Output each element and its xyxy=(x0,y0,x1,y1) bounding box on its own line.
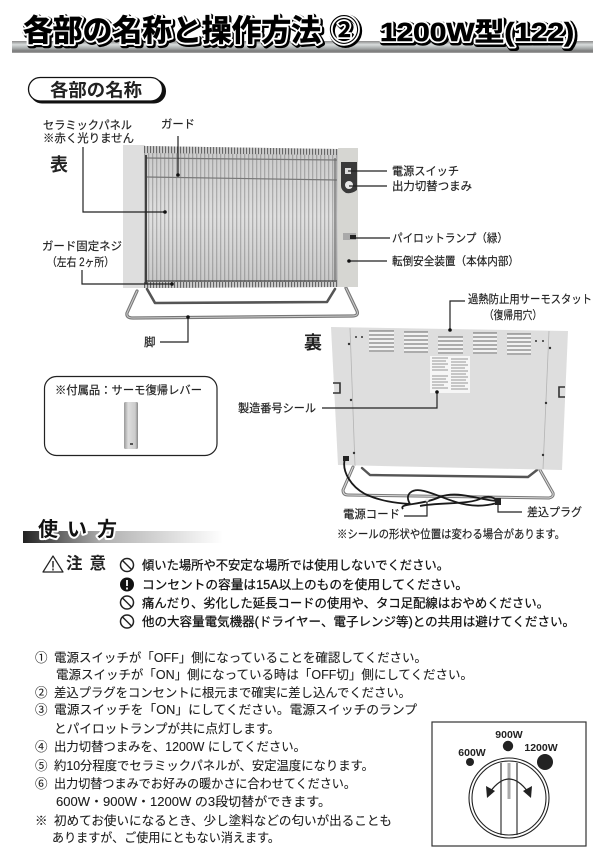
label: 裏: 裏 xyxy=(304,333,322,353)
instruction list: 電源スイッチが「OFF」側になっていることを確認してください。 xyxy=(54,650,427,665)
label: guard screws xyxy=(42,240,122,269)
note: sticker varies: ※シールの形状や位置は変わる場合があります。 xyxy=(337,527,565,541)
leader: power switch xyxy=(348,170,387,172)
label: ceramic panel: ※赤く光りません xyxy=(43,131,134,145)
section heading: 使い方: い xyxy=(67,519,87,541)
leader: output knob xyxy=(349,185,387,187)
instruction list: 電源スイッチが「ON」側になっている時は「OFF切」側にしてください。 xyxy=(56,667,473,682)
label: 表: 表 xyxy=(50,155,68,175)
title xyxy=(23,15,576,50)
section heading: 使い方: 使 xyxy=(38,518,58,541)
label: thermostat xyxy=(468,292,592,322)
leader: thermostat xyxy=(448,301,465,332)
label: legs: 脚 xyxy=(144,335,156,349)
caution list: 痛んだり、劣化した延長コードの使用や、タコ足配線はおやめください。 xyxy=(142,596,549,610)
icon: warning triangle xyxy=(43,556,63,572)
instruction list: 電源スイッチを「ON」にしてください。電源スイッチのランプ xyxy=(54,703,417,717)
section heading: 使い方: 使 xyxy=(38,518,58,541)
plug xyxy=(495,498,501,505)
icon: mandatory xyxy=(120,578,134,592)
leader: tip-over switch xyxy=(347,259,387,263)
instruction list: 差込プラグをコンセントに根元まで確実に差し込んでください。 xyxy=(54,685,411,700)
dial wattage labels: 1200W xyxy=(524,742,558,754)
title: 各部の名称と操作方法 xyxy=(24,16,322,50)
section heading: 使い方: 方 xyxy=(97,518,117,541)
label: guard screws: （左右 2ヶ所） xyxy=(47,255,114,269)
section pill: 各部の名称: 各部の名称 xyxy=(50,80,142,100)
dial position dots xyxy=(466,741,553,770)
label: power switch: 電源スイッチ xyxy=(392,164,459,178)
side brackets xyxy=(333,383,340,393)
title: ② xyxy=(329,15,359,48)
instruction list: 600W・900W・1200W の3段切替ができます。 xyxy=(56,794,331,809)
caution list: コンセントの容量は15A以上のものを使用してください。 xyxy=(142,577,468,592)
label: tip-over switch: 転倒安全装置（本体内部） xyxy=(392,254,519,268)
instruction list: 約10分程度でセラミックパネルが、安定温度になります。 xyxy=(54,758,374,773)
leader: guard screws xyxy=(82,270,174,286)
left side panel xyxy=(123,145,145,288)
instruction list: ※ xyxy=(35,814,48,828)
control panel xyxy=(341,162,357,193)
instruction list: ⑤ xyxy=(35,759,48,773)
label: power cord: 電源コード xyxy=(343,507,400,521)
title: 各部の名称と操作方法 xyxy=(23,15,321,48)
icon: prohibition 1 xyxy=(120,558,134,572)
caution list xyxy=(120,558,575,629)
instruction list: ありますが、ご使用にともない消えます。 xyxy=(52,830,280,845)
dial wattage labels xyxy=(458,729,558,759)
leader: plug xyxy=(498,503,522,512)
dial rotation arrows xyxy=(486,779,532,798)
serial sticker xyxy=(430,356,470,393)
front heater photo xyxy=(123,145,358,318)
instruction list: ③ xyxy=(35,703,48,717)
title: ② xyxy=(330,16,360,50)
section heading: 使い方 xyxy=(23,518,223,543)
dial diagram xyxy=(432,722,586,846)
title: 1200W型(122) xyxy=(382,18,576,48)
back plate xyxy=(331,327,568,470)
caution heading xyxy=(43,554,106,573)
icon: thermo reset lever xyxy=(124,402,138,449)
screws xyxy=(348,336,551,456)
leader: guard xyxy=(176,136,180,177)
instruction list: とパイロットランプが共に点灯します。 xyxy=(54,721,280,736)
leader: pilot lamp xyxy=(355,237,390,239)
right side panel xyxy=(338,148,358,287)
power cord xyxy=(344,458,498,509)
label: guard: ガード xyxy=(161,118,195,131)
instruction list: 出力切替つまみを、1200W にしてください。 xyxy=(54,740,306,754)
dial wattage labels: 600W xyxy=(458,747,486,759)
label: plug: 差込プラグ xyxy=(527,505,582,519)
label: pilot lamp: パイロットランプ（緑） xyxy=(392,232,508,245)
label: ceramic panel: セラミックパネル xyxy=(43,119,132,132)
instruction list: ② xyxy=(35,686,48,700)
label: thermostat: （復帰用穴） xyxy=(484,308,542,322)
leader: ceramic panel xyxy=(83,147,167,214)
label: ceramic panel xyxy=(43,119,134,145)
accessory box: ※付属品：サーモ復帰レバー xyxy=(55,383,202,397)
instruction list xyxy=(35,650,473,845)
vents xyxy=(369,331,531,355)
leader: serial sticker xyxy=(322,390,439,408)
leader: legs xyxy=(160,315,190,342)
accessory box xyxy=(44,376,217,456)
icon: prohibition 3 xyxy=(120,615,134,628)
dial knob xyxy=(469,758,549,838)
label: guard screws: ガード固定ネジ xyxy=(42,240,122,253)
legs xyxy=(127,288,357,318)
pilot lamp xyxy=(343,233,356,240)
title: 各部の名称と操作方法 xyxy=(23,15,321,48)
label: serial sticker: 製造番号シール xyxy=(238,401,316,415)
instruction list: ⑥ xyxy=(35,777,48,791)
caution heading: 注意 xyxy=(66,554,106,573)
instruction list: 初めてお使いになるとき、少し塗料などの匂いが出ることも xyxy=(54,813,392,828)
label: output knob: 出力切替つまみ xyxy=(392,179,472,193)
instruction list: ④ xyxy=(35,740,48,754)
rear legs xyxy=(343,467,553,498)
section heading: 使い方: い xyxy=(67,519,87,541)
title bar xyxy=(12,41,593,53)
dial wattage labels: 900W xyxy=(495,729,523,741)
title: 1200W型(122) xyxy=(380,17,574,47)
instruction list: 出力切替つまみでお好みの暖かさに合わせてください。 xyxy=(54,777,356,791)
leader: power cord xyxy=(404,498,429,516)
instruction list: ① xyxy=(35,651,48,665)
section heading: 使い方: 方 xyxy=(97,518,117,541)
section pill: 各部の名称 xyxy=(28,78,166,104)
grille panel xyxy=(144,146,338,288)
back heater photo xyxy=(331,327,568,509)
caution list: 傾いた場所や不安定な場所では使用しないでください。 xyxy=(142,558,449,572)
title: 1200W型(122) xyxy=(380,17,574,47)
title: ② xyxy=(329,15,359,48)
caution list: 他の大容量電気機器(ドライヤー、電子レンジ等)との共用は避けてください。 xyxy=(142,614,575,629)
icon: prohibition 2 xyxy=(120,596,134,609)
